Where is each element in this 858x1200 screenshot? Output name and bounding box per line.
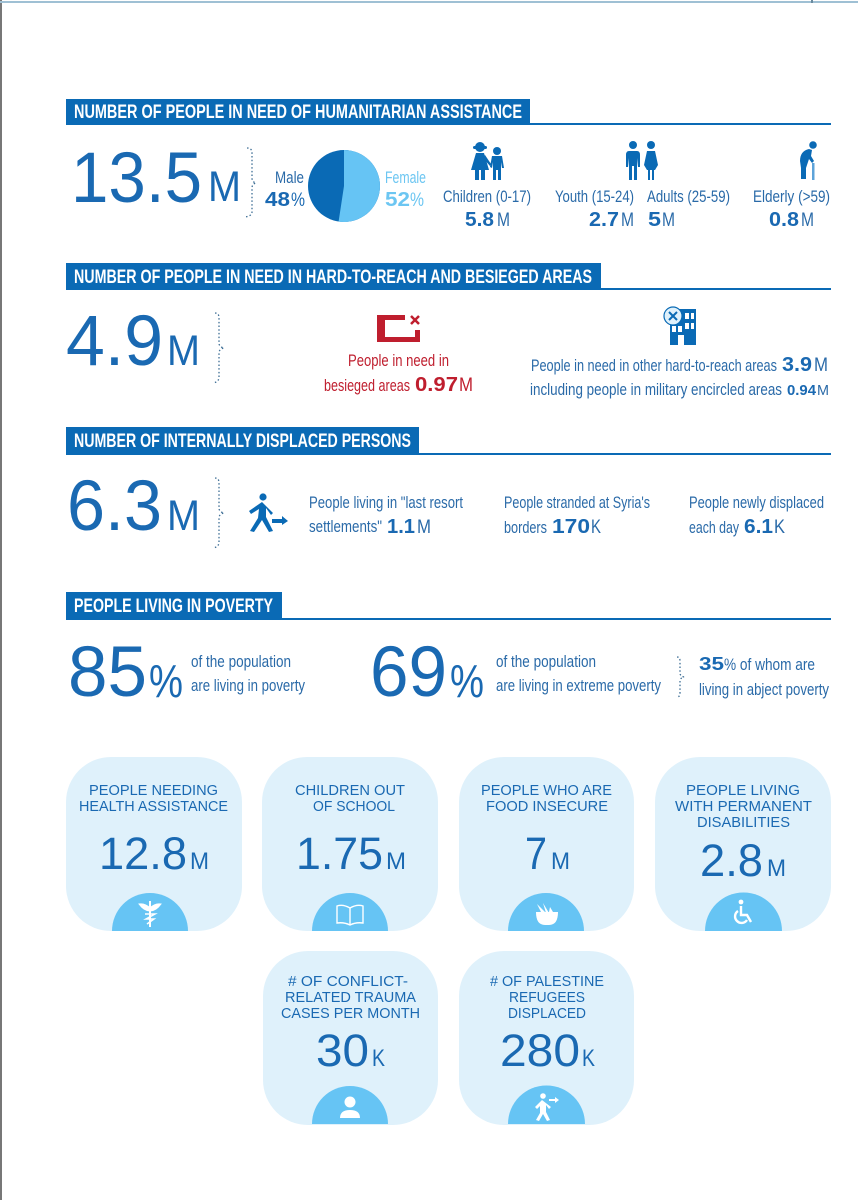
card: palestine refugees (459, 951, 634, 1125)
heading: humanitarian assistance (66, 99, 831, 125)
label: elderly: M (801, 210, 814, 231)
label: youth: 2.7 (589, 209, 619, 231)
69% in extreme poverty: % (450, 655, 484, 707)
label: adults: 5 (648, 209, 661, 231)
card: health assistance: 12.8 (99, 828, 187, 879)
label: youth: M (621, 210, 634, 231)
newly displaced text (689, 493, 824, 538)
label: children: Children (0-17) (443, 187, 531, 206)
total 4.9M: M (167, 327, 200, 375)
card: food insecure (459, 757, 634, 931)
icon: food bowl (536, 903, 558, 925)
card: palestine refugees: REFUGEES (509, 989, 585, 1006)
card: permanent disabilities: 2.8 (700, 835, 763, 886)
stranded at borders text: K (591, 517, 601, 538)
label: adults: Adults (25-59) (647, 187, 730, 206)
female share (385, 168, 426, 211)
card: trauma cases (263, 951, 438, 1125)
card: palestine refugees: DISPLACED (508, 1005, 586, 1022)
icon: caduceus (139, 901, 161, 927)
total 4.9M: 4.9 (66, 302, 163, 381)
35% abject poverty: % of whom are (724, 655, 815, 674)
total 13.5M: 13.5 (71, 139, 202, 218)
label: children: 5.8 (465, 209, 494, 231)
card: trauma cases: K (372, 1045, 385, 1072)
icon: youth and adults (626, 141, 658, 180)
besieged areas text: 0.97 (415, 374, 458, 396)
besieged areas text: besieged areas (324, 376, 410, 395)
card: permanent disabilities: WITH PERMANENT (675, 798, 812, 815)
card: children out of school: 1.75 (296, 828, 383, 879)
hard-to-reach text: M (817, 382, 829, 399)
label: adults (647, 187, 730, 231)
69% in extreme poverty: of the population (496, 652, 596, 671)
card: permanent disabilities: M (767, 855, 786, 882)
hard-to-reach text: People in need in other hard-to-reach areas (531, 356, 777, 375)
stranded at borders text: People stranded at Syria's (504, 493, 650, 512)
card: permanent disabilities: PEOPLE LIVING (686, 782, 800, 799)
icon: open book (337, 905, 363, 925)
card: trauma cases: RELATED TRAUMA (285, 989, 416, 1006)
icon: head and shoulders (340, 1096, 360, 1118)
heading: displaced persons: NUMBER OF INTERNALLY DISPLACED PERSONS (74, 431, 411, 452)
label: adults: M (662, 210, 675, 231)
newly displaced text: K (774, 517, 785, 538)
icon: besieged area (377, 315, 420, 342)
label: elderly: Elderly (>59) (753, 187, 830, 206)
total 13.5M: M (208, 163, 241, 211)
icon: children (471, 142, 504, 180)
icon: wheelchair (735, 900, 751, 923)
section: poverty (66, 592, 831, 712)
newly displaced text: each day (689, 518, 739, 537)
label: children: M (497, 210, 510, 231)
69% in extreme poverty: 69 (370, 633, 447, 712)
male share: Male (275, 168, 304, 187)
card: permanent disabilities: DISABILITIES (697, 814, 790, 831)
total 6.3M: M (167, 492, 200, 540)
last resort settlements text: People living in "last resort (309, 493, 463, 512)
icon: walking person with arrow (249, 493, 288, 532)
icon: walking refugee with arrow (535, 1093, 559, 1121)
section: hard-to-reach and besieged areas (66, 263, 831, 399)
heading: humanitarian assistance: NUMBER OF PEOPLE IN NEED OF HUMANITARIAN ASSISTANCE (74, 102, 522, 123)
heading: poverty (66, 592, 831, 620)
female share: % (410, 190, 424, 211)
female share: 52 (385, 189, 410, 211)
69% in extreme poverty: are living in extreme poverty (496, 676, 661, 695)
85% in poverty: are living in poverty (191, 676, 305, 695)
card: trauma cases: CASES PER MONTH (281, 1005, 420, 1022)
card: children out of school: CHILDREN OUT (295, 782, 405, 799)
hard-to-reach text (530, 354, 829, 399)
male share: % (291, 190, 305, 211)
35% abject poverty (699, 654, 829, 699)
card: palestine refugees: # OF PALESTINE (490, 973, 604, 990)
total 6.3M: 6.3 (67, 467, 162, 546)
besieged areas text (324, 351, 473, 396)
besieged areas text: M (459, 375, 473, 396)
label: youth: Youth (15-24) (555, 187, 634, 206)
card: children out of school (262, 757, 438, 931)
heading: hard-to-reach: NUMBER OF PEOPLE IN NEED IN HARD-TO-REACH AND BESIEGED AREAS (74, 267, 592, 288)
card: health assistance: PEOPLE NEEDING (89, 782, 218, 799)
label: children (443, 187, 531, 231)
card: palestine refugees: K (582, 1045, 595, 1072)
card: children out of school: OF SCHOOL (313, 798, 395, 815)
card: food insecure: FOOD INSECURE (486, 798, 608, 815)
card: trauma cases: # OF CONFLICT- (288, 973, 408, 990)
card: trauma cases: 30 (316, 1025, 369, 1076)
85% in poverty: of the population (191, 652, 291, 671)
69% in extreme poverty (370, 633, 661, 712)
stranded at borders text: 170 (552, 516, 590, 538)
label: youth (555, 187, 634, 231)
card: health assistance: HEALTH ASSISTANCE (79, 798, 228, 815)
card: health assistance: M (190, 848, 209, 875)
card: food insecure: 7 (525, 828, 547, 879)
female share: Female (385, 168, 426, 187)
hard-to-reach text: 0.94 (787, 382, 817, 399)
85% in poverty (68, 633, 305, 712)
last resort settlements text (309, 493, 463, 538)
card: palestine refugees: 280 (500, 1025, 580, 1076)
card: children out of school: M (386, 848, 406, 875)
male share: 48 (265, 189, 290, 211)
newly displaced text: 6.1 (744, 516, 773, 538)
35% abject poverty: 35 (699, 654, 724, 674)
section: internally displaced persons (66, 427, 831, 548)
section: people in need of humanitarian assistance (66, 99, 831, 231)
last resort settlements text: 1.1 (387, 516, 415, 538)
heading: poverty: PEOPLE LIVING IN POVERTY (74, 596, 273, 617)
card: health assistance (66, 757, 242, 931)
card: permanent disabilities (655, 757, 831, 931)
label: elderly (753, 187, 830, 231)
stranded at borders text (504, 493, 650, 538)
last resort settlements text: settlements" (309, 517, 382, 536)
hard-to-reach text: M (814, 355, 828, 376)
hard-to-reach text: including people in military encircled areas (530, 380, 782, 399)
hard-to-reach text: 3.9 (782, 354, 812, 376)
pie chart: male and female (308, 150, 380, 222)
85% in poverty: % (149, 655, 183, 707)
85% in poverty: 85 (68, 633, 147, 712)
last resort settlements text: M (417, 517, 431, 538)
besieged areas text: People in need in (348, 351, 449, 370)
card: food insecure: PEOPLE WHO ARE (481, 782, 612, 799)
label: elderly: 0.8 (769, 209, 799, 231)
card: food insecure: M (551, 848, 570, 875)
icon: elderly (800, 141, 817, 180)
male share (265, 168, 305, 211)
heading: displaced persons (66, 427, 831, 455)
stranded at borders text: borders (504, 518, 547, 537)
icon: building with x (664, 307, 696, 345)
